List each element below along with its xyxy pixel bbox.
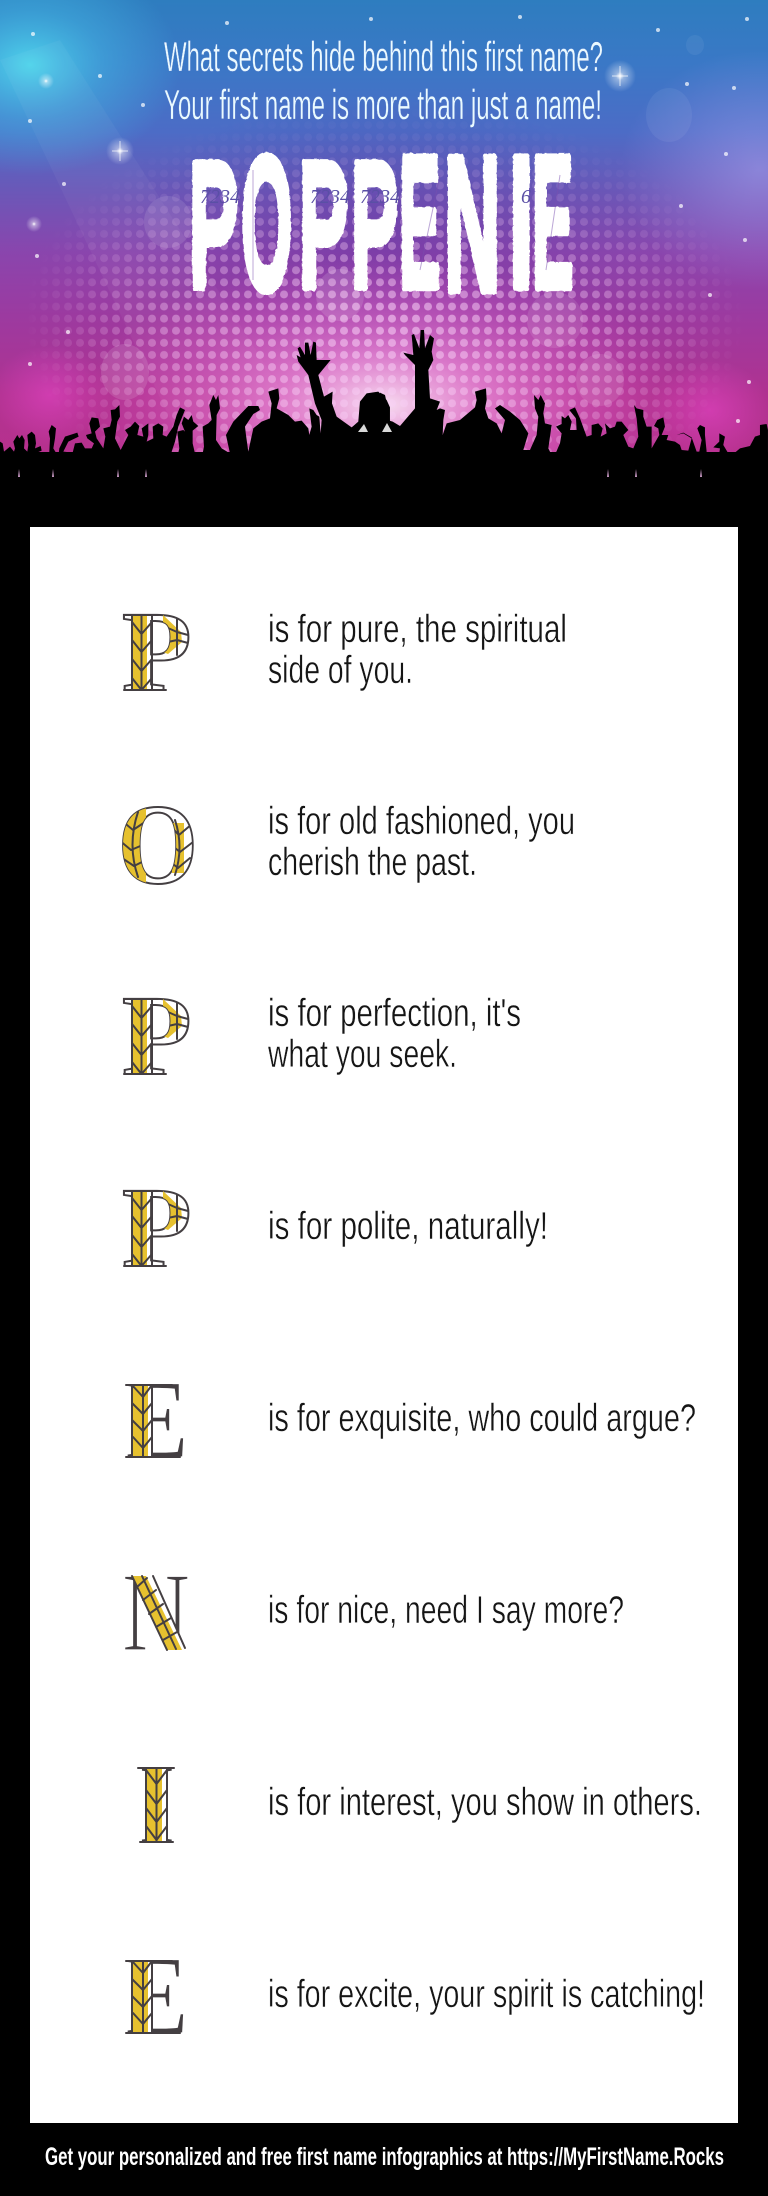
row 8: E [124,1934,705,2058]
text: P meaning: is for perfection, it's [268,992,521,1035]
title: POPPENIE: E [399,116,440,327]
icon: letter N: N [122,1551,190,1675]
title: POPPENIE: 7234 [310,186,350,208]
row 7: I [137,1742,702,1866]
icon: letter P: P [122,1164,192,1291]
text: P meaning [268,608,567,692]
icon: letter P: P [122,588,192,715]
sparkles [26,15,751,423]
icon: letter O: O [118,782,198,908]
row 6: N [122,1551,624,1675]
title: POPPENIE: E [532,116,573,327]
header: concert background [0,0,768,452]
row 1: P [122,614,565,691]
icon: letter O [122,806,194,885]
title: POPPENIE: 7234 [360,186,400,208]
row 5: E [124,1358,696,1482]
text: P meaning [267,992,521,1076]
text: N meaning: is for nice, need I say more? [268,1589,624,1632]
text: O meaning: is for old fashioned, you [268,800,575,843]
text: P meaning: is for polite, naturally! [268,1205,548,1248]
icon: letter P [122,998,190,1075]
title: POPPENIE: P [299,125,348,326]
white content panel [30,527,738,2123]
intro text [164,33,603,128]
title: POPPENIE: P [351,124,398,325]
title: POPPENIE: N [444,117,500,332]
icon: letter P [122,1190,190,1267]
title: POPPENIE: P [189,125,238,326]
icon: letter E: E [124,1934,189,2058]
crowd silhouette [0,330,768,528]
text: P meaning: is for pure, the spiritual [268,608,567,651]
icon: letter E: E [124,1358,189,1482]
icon: letter I: I [137,1742,177,1866]
row 3: P [122,998,520,1075]
title: POPPENIE: 6 [521,186,531,208]
text: O meaning [268,800,575,884]
text: P meaning: side of you. [268,649,413,692]
icon: letter P [122,614,190,691]
title: POPPENIE: O [241,118,292,330]
row 2: O [122,806,574,885]
row 4: P [122,1190,546,1267]
text: P meaning: what you seek. [267,1033,457,1076]
title: POPPENIE [189,116,573,332]
text: O meaning: cherish the past. [268,841,477,884]
icon: letter P: P [122,972,192,1099]
title: POPPENIE: I [509,118,533,328]
title: POPPENIE: 7234 [200,186,240,208]
